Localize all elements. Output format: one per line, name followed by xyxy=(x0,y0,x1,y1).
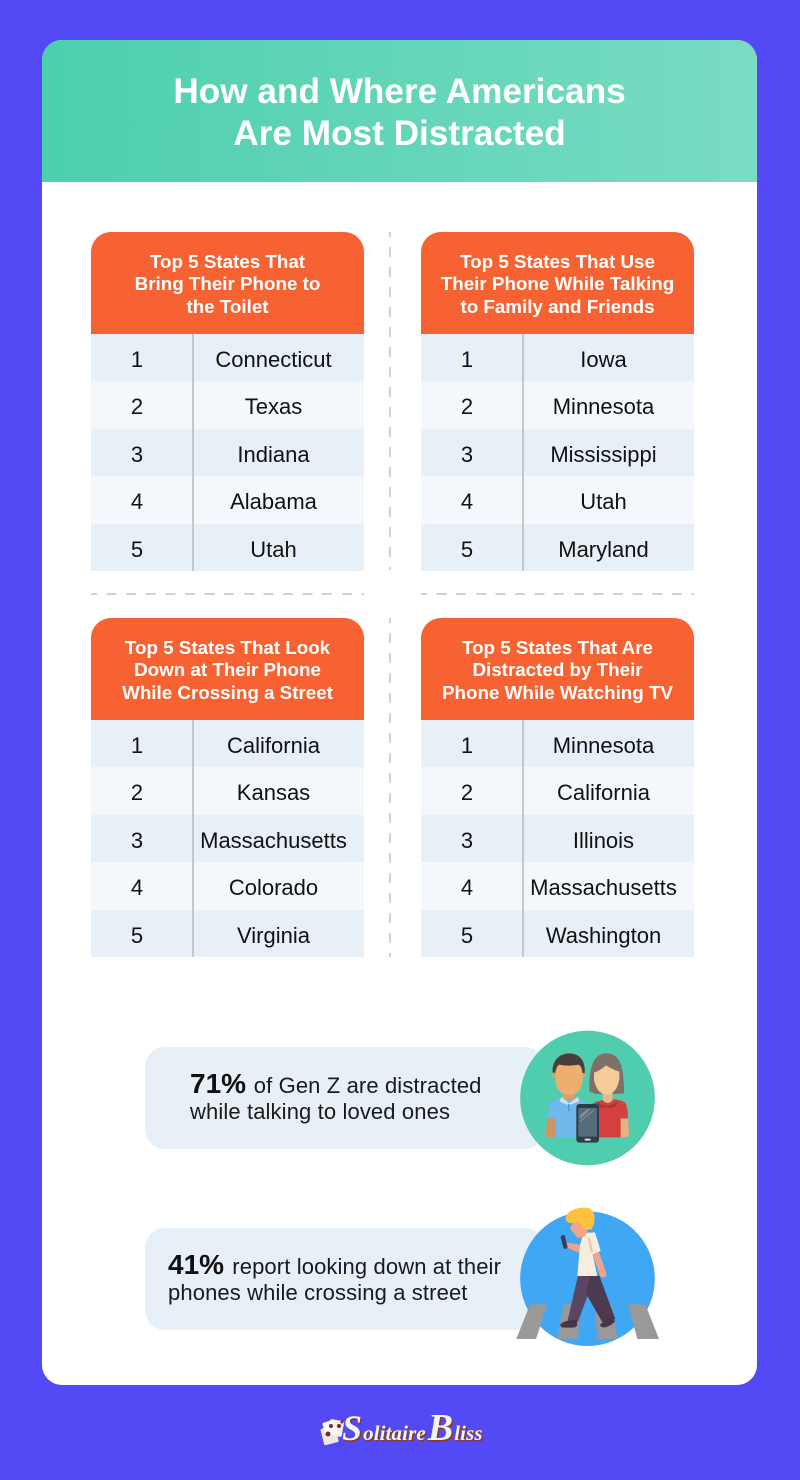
panel: crossing street table: Massachusetts xyxy=(200,828,347,853)
panel: watching TV table: Minnesota xyxy=(553,733,654,758)
callout text: Gen Z: while talking to loved ones xyxy=(190,1098,450,1124)
panel: watching TV table: 2 xyxy=(461,780,473,805)
panel: watching TV table: California xyxy=(557,780,650,805)
callout text: Gen Z xyxy=(190,1068,482,1124)
heading: crossing street: Top 5 States That Look xyxy=(125,636,330,658)
panel: toilet table: 4 xyxy=(131,489,143,514)
panel: toilet table: 3 xyxy=(131,442,143,467)
panel: family and friends table xyxy=(421,232,694,571)
panel: watching TV table: 3 xyxy=(461,828,473,853)
panel: family and friends table: 2 xyxy=(461,394,473,419)
panel: family and friends table: Mississippi xyxy=(550,442,657,467)
heading: toilet xyxy=(91,232,364,334)
callout text: Gen Z: 71% of Gen Z are distracted xyxy=(190,1068,482,1099)
heading: toilet: the Toilet xyxy=(186,296,269,317)
icon: couple with phone xyxy=(520,1030,655,1166)
panel: toilet table: 5 xyxy=(131,537,143,562)
icon: person crossing street xyxy=(516,1208,659,1346)
callout text: crossing street: phones while crossing a street xyxy=(168,1280,468,1304)
callout: crossing street xyxy=(145,1228,545,1330)
heading: crossing street: While Crossing a Street xyxy=(122,682,333,703)
panel: crossing street table: 4 xyxy=(131,875,143,900)
callout text: crossing street xyxy=(168,1249,501,1304)
heading: watching TV xyxy=(421,618,694,720)
panel: toilet table: 2 xyxy=(131,394,143,419)
panel: family and friends table: Minnesota xyxy=(553,394,654,419)
logo wordmark: SolitaireBliss xyxy=(342,1407,483,1449)
panel: crossing street table: Kansas xyxy=(237,780,310,805)
panel: toilet table xyxy=(91,232,364,571)
panel: family and friends table: Iowa xyxy=(580,347,627,372)
icon: playing cards xyxy=(320,1419,344,1446)
logo: Solitaire Bliss xyxy=(320,1407,484,1449)
heading: toilet: Bring Their Phone to xyxy=(135,273,320,294)
panel: family and friends table: 4 xyxy=(461,489,473,514)
callout text: crossing street: 41% report looking down at their xyxy=(168,1249,501,1280)
panel: family and friends table: 1 xyxy=(461,347,473,372)
panel: family and friends table: Maryland xyxy=(558,537,649,562)
panel: watching TV table: Massachusetts xyxy=(530,875,677,900)
panel: toilet table: Texas xyxy=(245,394,302,419)
panel: crossing street table: Colorado xyxy=(229,875,318,900)
panel: watching TV table: 5 xyxy=(461,923,473,948)
heading: family and friends: Top 5 States That Use xyxy=(460,250,655,272)
heading: family and friends xyxy=(421,232,694,334)
panel: crossing street table xyxy=(91,618,364,957)
panel: family and friends table: 3 xyxy=(461,442,473,467)
panel: family and friends table: 5 xyxy=(461,537,473,562)
title: Are Most Distracted xyxy=(233,114,566,153)
panel: crossing street table: Virginia xyxy=(237,923,310,948)
panel: watching TV table: Washington xyxy=(546,923,661,948)
panel: family and friends table: Utah xyxy=(580,489,627,514)
panel: watching TV table xyxy=(421,618,694,957)
heading: family and friends: Their Phone While Talking xyxy=(441,273,674,294)
heading: crossing street: Down at Their Phone xyxy=(134,659,321,680)
panel: crossing street table: 1 xyxy=(131,733,143,758)
heading: watching TV: Phone While Watching TV xyxy=(442,682,673,703)
title xyxy=(173,72,626,153)
panel: toilet table: Alabama xyxy=(230,489,317,514)
panel: crossing street table: 5 xyxy=(131,923,143,948)
heading: toilet: Top 5 States That xyxy=(150,250,305,272)
heading: watching TV: Distracted by Their xyxy=(472,659,643,680)
panel: crossing street table: 3 xyxy=(131,828,143,853)
panel: watching TV table: Illinois xyxy=(573,828,634,853)
title: How and Where Americans xyxy=(173,72,626,110)
panel: crossing street table: California xyxy=(227,733,320,758)
panel: watching TV table: 1 xyxy=(461,733,473,758)
panel: crossing street table: 2 xyxy=(131,780,143,805)
panel: toilet table: Connecticut xyxy=(215,347,332,372)
panel: toilet table: Utah xyxy=(250,537,297,562)
heading: watching TV: Top 5 States That Are xyxy=(462,636,653,658)
heading: crossing street xyxy=(91,618,364,720)
callout: Gen Z xyxy=(145,1047,545,1149)
header band xyxy=(42,40,757,182)
heading: family and friends: to Family and Friends xyxy=(460,296,655,317)
panel: toilet table: Indiana xyxy=(237,442,310,467)
panel: watching TV table: 4 xyxy=(461,875,473,900)
panel: toilet table: 1 xyxy=(131,347,143,372)
